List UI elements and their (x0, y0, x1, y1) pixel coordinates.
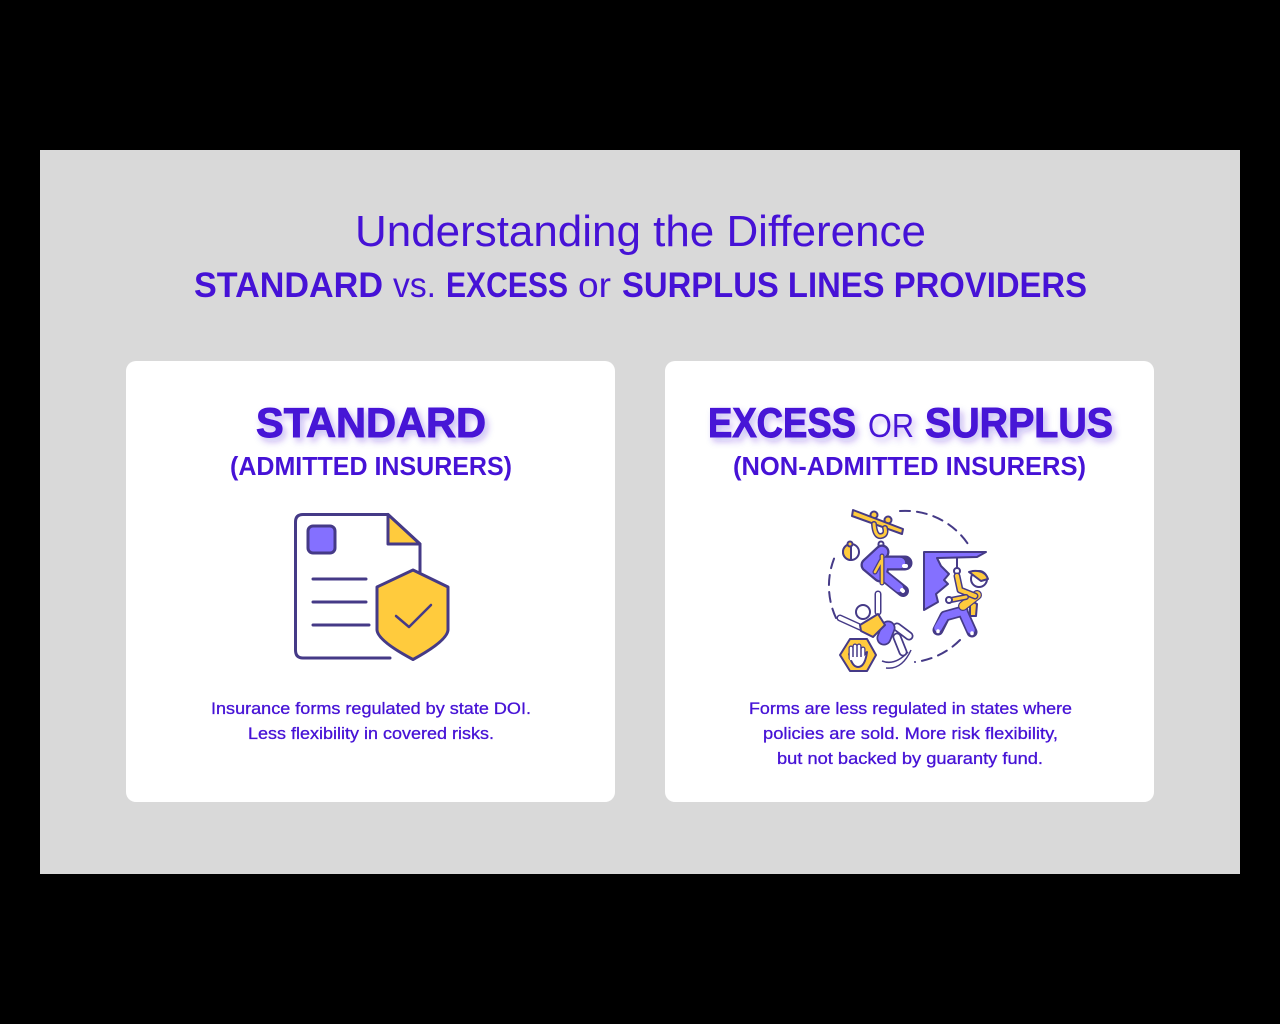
title: Understanding the Difference (355, 207, 926, 256)
description: standard (211, 700, 531, 743)
title: or (578, 266, 611, 305)
heading: excess or surplus: SURPLUS (925, 399, 1113, 446)
dashed circle (829, 511, 968, 662)
title: SURPLUS LINES PROVIDERS (622, 266, 1087, 305)
description: excess or surplus: policies are sold. More risk flexibility, (763, 725, 1058, 743)
subheading: non-admitted insurers: (NON-ADMITTED INSURERS) (733, 453, 1086, 481)
heading: standard: STANDARD (256, 399, 486, 446)
heading: excess or surplus: OR (868, 407, 914, 444)
description: excess or surplus: but not backed by guaranty fund. (777, 750, 1043, 768)
stop sign (840, 639, 876, 671)
icon: climbers in risky situations (829, 510, 988, 671)
heading: excess or surplus (708, 399, 1113, 446)
description: standard: Insurance forms regulated by state DOI. (211, 700, 531, 718)
description: excess or surplus: Forms are less regulated in states where (749, 700, 1072, 718)
title: STANDARD (194, 266, 383, 305)
icon: document with shield (296, 514, 448, 660)
title: vs. (393, 266, 436, 305)
heading: excess or surplus: EXCESS (708, 399, 856, 446)
zip line climber (843, 510, 906, 591)
falling climber (840, 594, 909, 652)
description: standard: Less flexibility in covered risks. (248, 725, 494, 743)
cliff (924, 552, 986, 610)
description: excess or surplus (749, 700, 1072, 768)
panel: excess or surplus (665, 361, 1154, 802)
background panel (40, 150, 1240, 874)
title (194, 207, 1087, 305)
hanging climber (938, 557, 988, 634)
title: EXCESS (446, 266, 568, 305)
panel: standard (126, 361, 615, 802)
subheading: admitted insurers: (ADMITTED INSURERS) (230, 453, 512, 481)
